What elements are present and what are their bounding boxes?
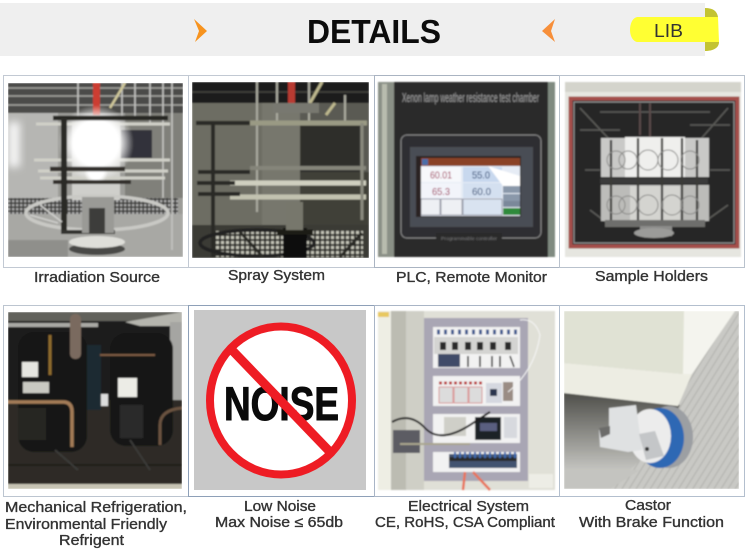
caption: low noise: Max Noise ≤ 65db [215,515,343,531]
right chevron icon [542,19,555,42]
left chevron icon [194,19,207,42]
photo: castor wheel [564,311,739,489]
caption: mechanical refrigeration: Mechanical Refrigeration, [5,500,187,516]
caption: mechanical refrigeration: Environmental Friendly [5,517,168,533]
panel: irradiation source [4,76,188,268]
photo: control panel: Programmable controller [441,236,498,241]
caption: castor [579,498,724,531]
photo: control panel: 60.01 [430,170,452,182]
caption: low noise [215,499,343,531]
caption: low noise: Low Noise [244,499,316,515]
photo: compressors [8,312,182,489]
photo: control panel [378,82,555,257]
caption: castor: With Brake Function [579,515,724,531]
panel: electrical system [374,306,560,496]
photo: spray chamber [192,82,369,258]
photo: control panel: Xenon lamp weather resistance test chamber [402,90,539,105]
panel: castor [560,306,744,496]
icon: no noise sign [194,310,366,490]
caption: mechanical refrigeration [5,500,187,549]
icon: no noise sign: NOISE [224,377,339,430]
photo: electrical cabinet [378,311,555,490]
photo: sample rack [565,82,741,257]
LIB ribbon badge: LIB [654,21,683,41]
photo: xenon lamp chamber [8,83,183,257]
caption: sample holders: Sample Holders [595,269,708,285]
title: DETAILS [307,13,441,50]
panel: mechanical refrigeration [4,306,188,496]
caption: spray system: Spray System [228,268,325,284]
photo: control panel: 65.3 [432,186,450,198]
panel: spray system [188,76,374,268]
caption: irradiation source: Irradiation Source [34,270,160,286]
panel: PLC remote monitor [374,76,560,268]
photo: control panel: 55.0 [472,170,490,182]
photo: control panel: 60.0 [472,186,491,198]
caption: mechanical refrigeration: Refrigent [59,533,124,549]
caption: electrical system: CE, RoHS, CSA Compliant [375,515,555,531]
header banner [0,3,705,56]
caption: electrical system: Electrical System [408,499,529,515]
caption: castor: Castor [625,498,671,514]
panel: sample holders [560,76,744,268]
panel: low noise [188,306,374,496]
LIB ribbon badge [630,8,719,51]
caption: PLC remote monitor: PLC, Remote Monitor [396,270,547,286]
caption: electrical system [375,499,555,531]
